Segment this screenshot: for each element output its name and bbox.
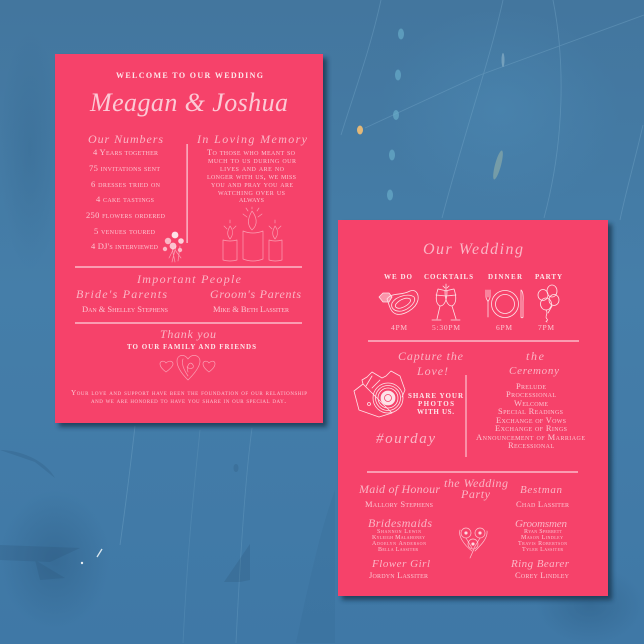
block: bridesmaids: Kyleigh Malahoney [372,535,425,541]
list: ceremony order: Exchange of Rings [495,423,567,433]
panel: groom's parents: Mike & Beth Lassiter [213,304,289,314]
panel: capture the love [354,349,464,447]
heading: capture the love: Capture the [398,349,464,363]
text: share your photos [408,392,464,416]
panel: bride's parents: Dan & Shelley Stephens [82,304,168,314]
heading: welcome: WELCOME TO OUR WEDDING [116,71,263,80]
block: ring bearer [510,558,570,580]
panel: bride's parents: Bride's Parents [76,287,167,301]
block: bestman [516,484,569,509]
divider: right card lower [367,471,578,473]
text: memorial message: To those who meant so [207,147,296,157]
text: memorial message: always [239,194,264,204]
list: ceremony order: Announcement of Marriage [476,432,585,442]
list: wedding numbers: 4 cake tastings [96,194,154,204]
list: wedding numbers: 250 flowers ordered [86,210,166,220]
schedule labels: DINNER [488,273,523,281]
schedule times [391,323,554,332]
divider: left card upper [75,266,302,268]
title: couple names: Meagan & Joshua [89,88,288,117]
block: groomsmen: Groomsmen [515,518,568,530]
block: maid of honour: Mallory Stephens [365,499,433,509]
text: memorial message [207,147,296,204]
text: hashtag: #ourday [376,431,435,447]
heading: the ceremony [509,349,559,377]
schedule times: 6PM [496,323,512,332]
heading: capture the love: Love! [416,364,448,378]
text: share your photos: SHARE YOUR [408,392,464,400]
panel: groom's parents: Groom's Parents [210,287,301,301]
heading: thank you: Thank you [160,327,216,341]
list: ceremony order: Prelude [516,381,546,391]
icon: floral bouquet [460,528,487,558]
divider: vertical left card [186,144,188,243]
block: groomsmen: Ryan Sperrett [524,529,563,535]
text: share your photos: PHOTOS [418,400,454,408]
block: bestman: Chad Lassiter [516,499,569,509]
block: flower girl [369,558,430,580]
heading: our wedding: Our Wedding [423,241,523,258]
block: groomsmen: Mason Lindley [521,535,563,541]
icon: rings [379,291,418,314]
list: ceremony order: Recessional [508,440,554,450]
block: ring bearer: Corey Lindley [515,570,570,580]
heading: the wedding party: Party [460,487,491,501]
schedule labels: COCKTAILS [424,273,473,281]
list: wedding numbers [86,147,166,251]
heading: the wedding party: the Wedding [444,476,508,490]
schedule labels: PARTY [535,273,562,281]
panel: groom's parents [210,287,301,314]
heading: the ceremony: Ceremony [509,365,559,377]
block: flower girl: Flower Girl [371,558,430,570]
schedule labels: WE DO [384,273,413,281]
text: closing thanks: and we are honored to have you share in our special day. [91,397,286,405]
icon: champagne glasses [432,284,460,320]
panel: ceremony program card [338,220,608,596]
block: flower girl: Jordyn Lassiter [369,570,428,580]
block: bridesmaids: Adoelyn Anderson [372,541,426,547]
panel: schedule timeline [379,273,562,332]
block: groomsmen: Tyler Lassiter [522,547,563,553]
list: wedding numbers: 4 DJ's interviewed [91,241,159,251]
schedule times: 5:30PM [432,323,460,332]
panel: welcome program card [55,54,323,423]
block: bridesmaids: Shannon Lewin [377,529,421,535]
heading: capture the love [398,349,464,378]
panel: our numbers [86,132,166,251]
heading: the wedding party [444,476,508,501]
schedule times: 7PM [538,323,554,332]
list: ceremony order: Processional [506,389,556,399]
block: bridesmaids: Bella Lassiter [378,547,418,553]
panel: wedding party [358,476,570,580]
block: groomsmen [515,518,568,553]
schedule times: 4PM [391,323,407,332]
block: groomsmen: Travis Robertson [518,541,567,547]
heading: our numbers: Our Numbers [88,132,163,146]
list: ceremony order: Exchange of Vows [496,415,566,425]
text: memorial message: much to us during our [208,155,296,165]
block: bestman: Bestman [520,484,562,496]
heading: important people: Important People [136,272,242,286]
divider: vertical right card [465,375,467,457]
block: ring bearer: Ring Bearer [510,558,570,570]
card shadow: left [59,58,327,427]
text: memorial message: longer with us, we miss [207,171,296,181]
list: ceremony order: Welcome [514,398,548,408]
card shadow: right [342,224,612,600]
block: maid of honour: Maid of Honour [358,482,440,496]
heading: the ceremony: the [526,349,545,363]
text: share your photos: WITH US. [417,408,454,416]
block: bridesmaids: Bridesmaids [368,516,432,530]
block: maid of honour [358,482,440,509]
text: memorial message: you and pray you are [211,179,293,189]
divider: right card upper [368,340,579,342]
text: memorial message: lives and are no [220,163,285,173]
icon: three candles [223,207,282,261]
divider: left card lower [75,322,302,324]
list: wedding numbers: 5 venues toured [94,226,156,236]
list: ceremony order: Special Readings [498,406,563,416]
icon: bouquet [163,232,184,262]
text: closing thanks: Your love and support have been the foundation of our relationship [71,389,307,397]
list: wedding numbers: 6 dresses tried on [91,179,161,189]
text: to our family and friends: TO OUR FAMILY AND FRIENDS [127,343,256,351]
icon: balloons [538,285,559,322]
list: ceremony order [476,381,585,450]
icon: camera [354,371,405,417]
panel: bride's parents [76,287,168,314]
heading: in loving memory: In Loving Memory [196,132,308,146]
panel: the ceremony [476,349,585,450]
block: bridesmaids [368,516,432,553]
icon: place setting [486,290,523,318]
schedule labels [384,273,562,281]
icon: three hearts [160,355,215,380]
panel: in loving memory [196,132,308,204]
list: wedding numbers: 4 Years together [93,147,158,157]
text: memorial message: watching over us [218,187,285,197]
text: closing thanks [71,389,307,405]
list: wedding numbers: 75 invitations sent [89,163,160,173]
